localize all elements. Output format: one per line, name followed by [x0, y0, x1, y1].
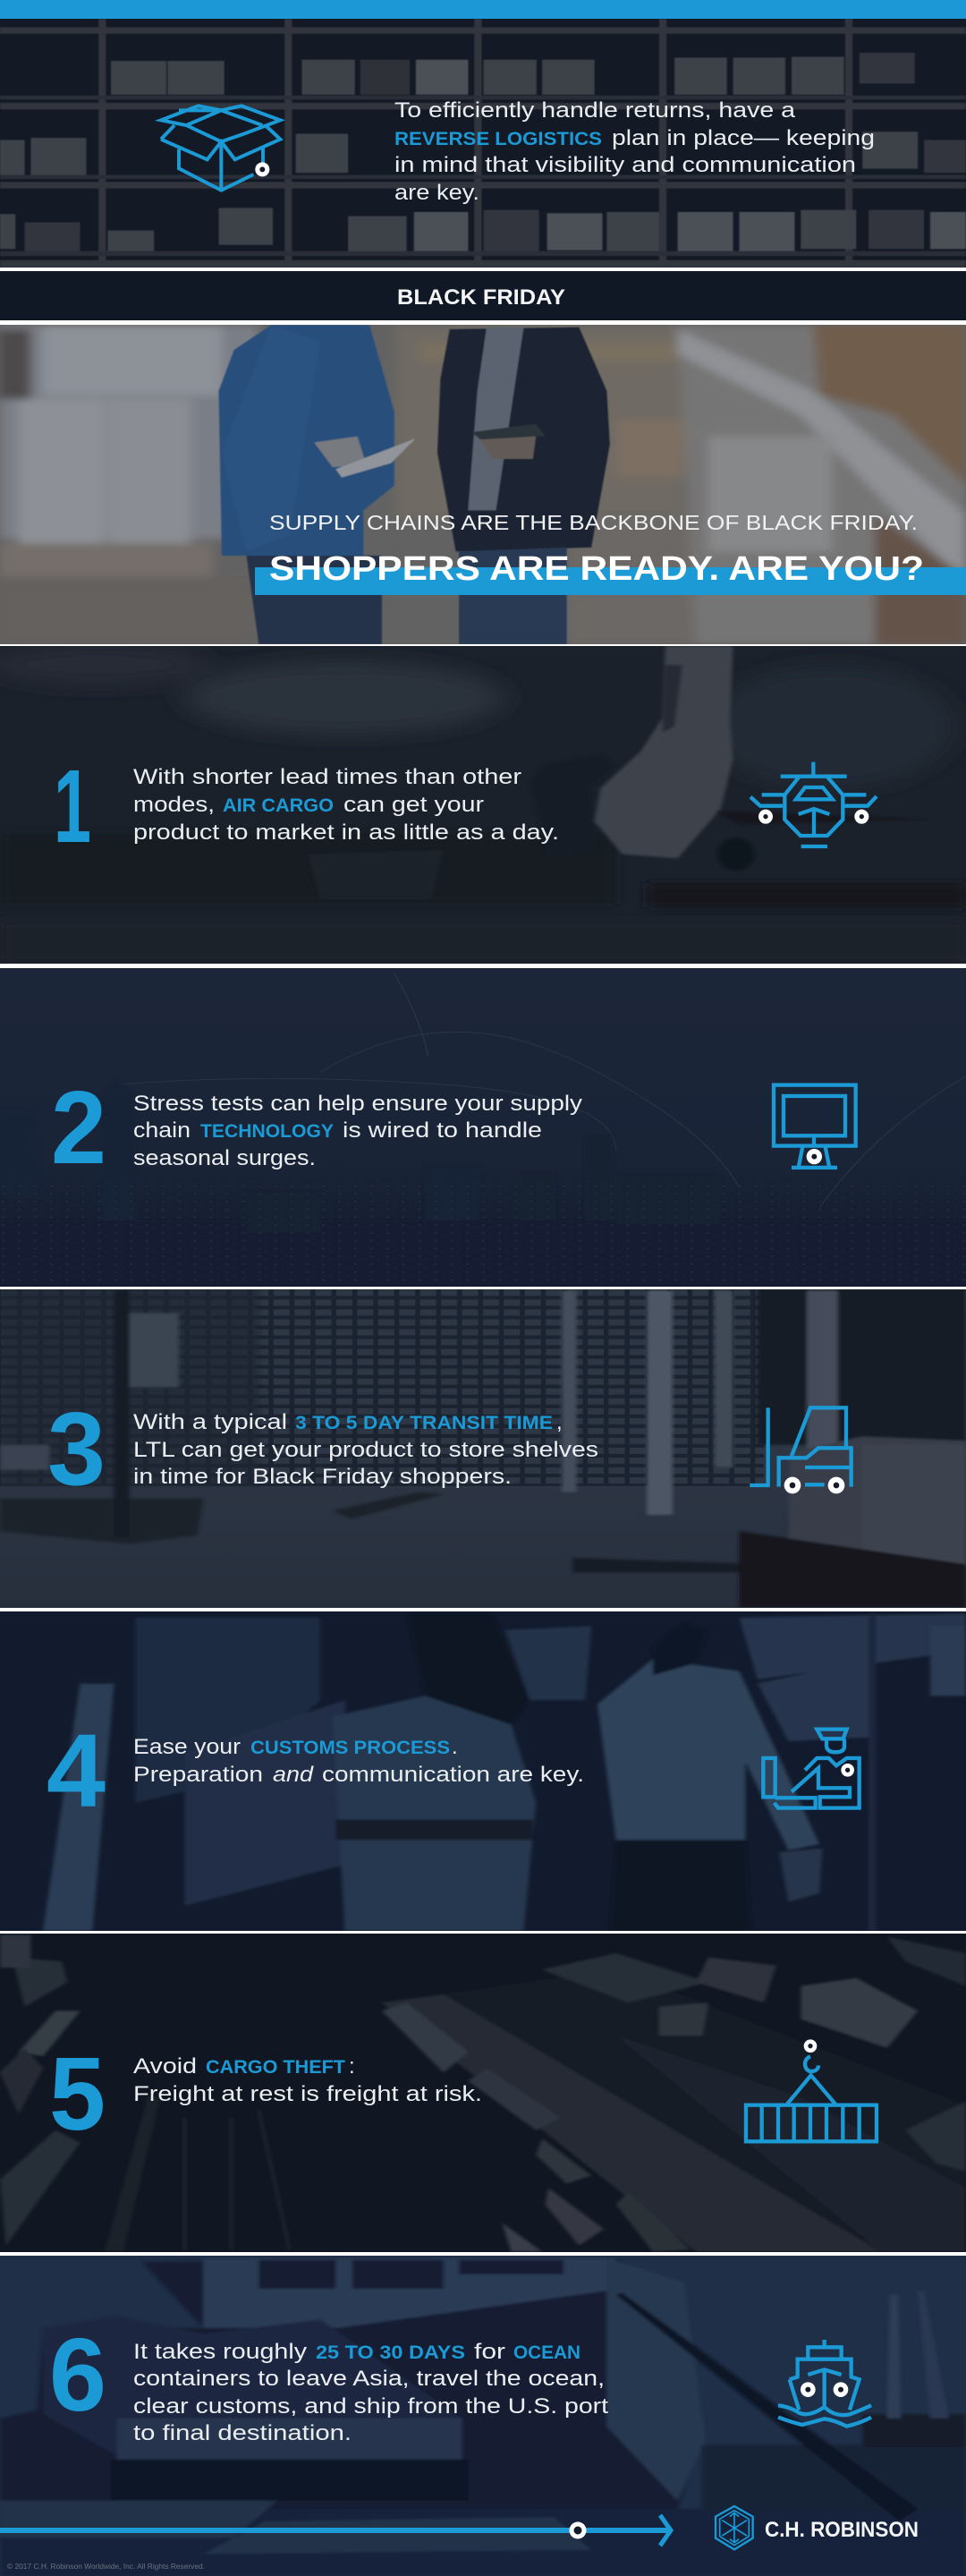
blue headline bar: [255, 567, 966, 595]
number 3: 3: [47, 1390, 106, 1507]
text: reverse logistics: [394, 98, 875, 205]
text: ocean: 25 TO 30 DAYS: [316, 2342, 465, 2363]
text: transit time: ,: [556, 1410, 563, 1434]
headline text: SUPPLY CHAINS ARE THE BACKBONE OF BLACK FRIDAY.: [269, 511, 918, 534]
text: ocean: clear customs, and ship from the U.S. port: [133, 2394, 608, 2419]
text: cargo theft: Freight at rest is freight at risk.: [133, 2082, 482, 2106]
text: customs: communication are key.: [322, 1763, 584, 1787]
text: reverse logistics: plan in place— keeping: [612, 126, 875, 150]
text: air cargo: With shorter lead times than other: [133, 765, 521, 789]
arrow timeline: [0, 2515, 671, 2546]
logo: C.H. Robinson: [716, 2506, 919, 2549]
text: technology: is wired to handle: [343, 1118, 542, 1143]
text: transit time: 3 TO 5 DAY TRANSIT TIME: [295, 1412, 553, 1433]
text: customs: Preparation: [133, 1763, 263, 1787]
panel 2: technology: [0, 968, 966, 1287]
text: reverse logistics: REVERSE LOGISTICS: [394, 128, 602, 149]
icon: ship: [778, 2340, 871, 2427]
text: transit time: in time for Black Friday shoppers.: [133, 1465, 512, 1489]
text: reverse logistics: in mind that visibility and communication: [394, 153, 856, 177]
text: cargo theft: CARGO THEFT: [206, 2056, 345, 2078]
text: customs: Ease your: [133, 1735, 241, 1759]
number 1: 1: [54, 748, 91, 864]
text: ocean: for: [474, 2340, 505, 2364]
text: reverse logistics: are key.: [394, 181, 479, 205]
logo: C.H. Robinson: C.H. ROBINSON: [765, 2518, 919, 2542]
text: air cargo: can get your: [343, 793, 484, 817]
text: technology: [133, 1092, 582, 1170]
text: cargo theft: Avoid: [133, 2054, 197, 2079]
panel 4: customs: [0, 1611, 966, 1931]
number 2: 2: [51, 1069, 106, 1186]
text: air cargo: [133, 765, 559, 845]
text: cargo theft: [133, 2054, 482, 2106]
text: customs: and: [273, 1763, 314, 1787]
text: air cargo: AIR CARGO: [223, 795, 334, 816]
top blue bar: [0, 0, 966, 19]
text: technology: seasonal surges.: [133, 1146, 316, 1170]
icon: airplane: [750, 762, 877, 846]
banner: black friday: [0, 271, 966, 320]
text: transit time: LTL can get your product to store shelves: [133, 1438, 598, 1462]
text: transit time: With a typical: [133, 1410, 287, 1434]
icon: monitor: [774, 1085, 856, 1168]
copyright: © 2017 C.H. Robinson Worldwide, Inc. All Rights Reserved.: [7, 2563, 205, 2571]
text: cargo theft: :: [349, 2054, 355, 2079]
text: customs: .: [452, 1735, 458, 1759]
number 6: 6: [49, 2317, 106, 2433]
text: ocean: OCEAN: [513, 2342, 580, 2363]
icon: hanging container: [746, 2039, 877, 2141]
text: transit time: [133, 1410, 598, 1489]
panel 1: air cargo: [0, 644, 966, 964]
panel 6: ocean: [0, 2256, 966, 2576]
panel 3: LTL: [0, 1288, 966, 1608]
number 4: 4: [47, 1713, 106, 1829]
text: ocean: to final destination.: [133, 2421, 352, 2445]
text: technology: chain: [133, 1118, 191, 1143]
text: ocean: containers to leave Asia, travel the ocean,: [133, 2367, 605, 2391]
panel: reverse logistics: [0, 19, 966, 268]
icon: customs officer: [763, 1730, 860, 1808]
text: technology: TECHNOLOGY: [200, 1120, 334, 1142]
number 5: 5: [49, 2036, 106, 2152]
icon: open box: [161, 106, 280, 191]
text: customs: CUSTOMS PROCESS: [250, 1737, 450, 1758]
text: ocean: It takes roughly: [133, 2340, 307, 2364]
text: ocean: [133, 2340, 608, 2445]
headline text: SHOPPERS ARE READY. ARE YOU?: [269, 550, 924, 588]
text: air cargo: modes,: [133, 793, 215, 817]
icon: forklift: [750, 1407, 852, 1493]
text: reverse logistics: To efficiently handle returns, have a: [394, 98, 796, 123]
text: customs: [133, 1735, 584, 1787]
panel 5: cargo theft: [0, 1934, 966, 2252]
headline text: [269, 511, 924, 588]
text: technology: Stress tests can help ensure your supply: [133, 1092, 582, 1116]
text: air cargo: product to market in as little as a day.: [133, 820, 559, 845]
banner: black friday: BLACK FRIDAY: [397, 285, 565, 310]
panel: hero photo: [0, 325, 966, 644]
